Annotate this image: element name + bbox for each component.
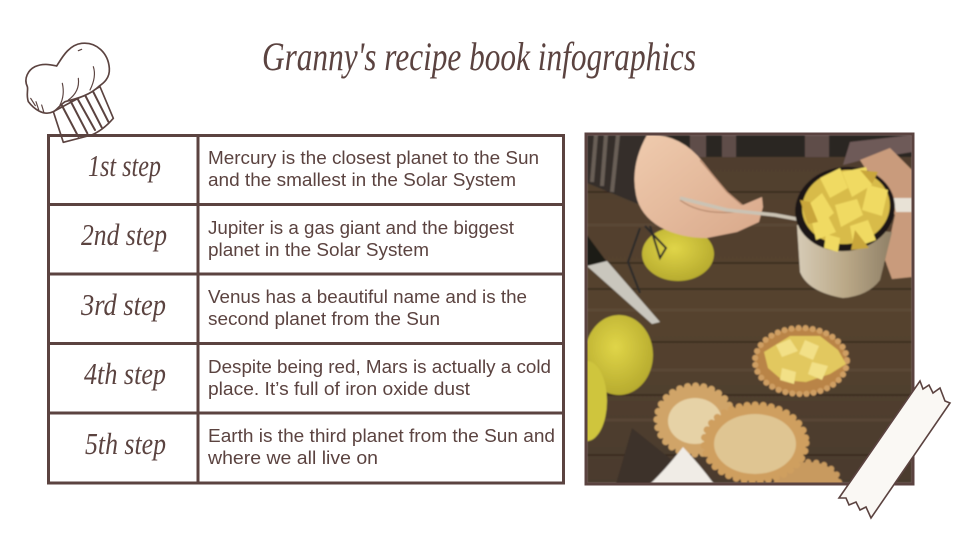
row 3: 3rd step	[80, 287, 166, 322]
row 1	[88, 148, 539, 190]
icon: chef hat	[26, 43, 113, 142]
filled tart	[755, 328, 847, 394]
row 2: 2nd step	[81, 217, 167, 252]
title: Granny's recipe book infographics	[262, 34, 696, 79]
row 1: and the smallest in the Solar System	[208, 170, 516, 190]
row 5	[85, 426, 555, 468]
crust center	[704, 405, 806, 481]
photo frame	[586, 134, 913, 484]
crust back right	[773, 458, 843, 482]
photo: apple tarts on a wooden table	[567, 134, 913, 502]
table: recipe steps	[48, 136, 564, 483]
row 1: 1st step	[88, 148, 161, 183]
row 2: Jupiter is a gas giant and the biggest	[208, 218, 514, 238]
lower left apples	[585, 315, 653, 395]
row 4: Despite being red, Mars is actually a cold	[208, 357, 551, 377]
row 3	[80, 287, 527, 329]
washi tape	[839, 381, 950, 518]
row 2: planet in the Solar System	[208, 240, 429, 260]
row 5: where we all live on	[207, 448, 378, 468]
row 2	[81, 217, 514, 260]
row 4	[84, 356, 551, 399]
row 5: 5th step	[85, 426, 166, 461]
hand with spoon	[634, 135, 763, 238]
apple under hand	[642, 227, 714, 281]
row 5: Earth is the third planet from the Sun and	[208, 426, 555, 446]
row 3: Venus has a beautiful name and is the	[208, 287, 527, 307]
row 4: 4th step	[84, 356, 166, 391]
meringue	[650, 447, 714, 484]
row 4: place. It’s full of iron oxide dust	[208, 379, 470, 399]
row 3: second planet from the Sun	[208, 309, 440, 329]
table grid	[48, 136, 564, 483]
row 1: Mercury is the closest planet to the Sun	[208, 148, 539, 168]
crust left	[657, 386, 733, 454]
